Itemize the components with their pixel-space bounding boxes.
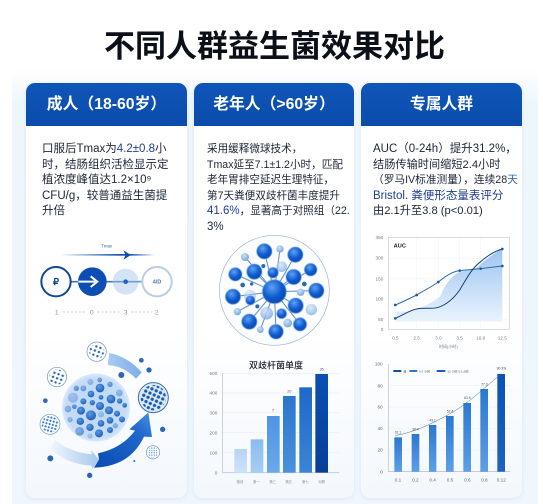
- text: special groups: Bristol. 粪便形态量表评分: [373, 190, 503, 202]
- bar chart: score by dose: 0.6: [464, 477, 471, 482]
- line chart: AUC: 10.0: [476, 336, 486, 341]
- bar chart: score by dose: 60: [377, 405, 383, 410]
- bar chart: bifidobacterium abundance: 400: [210, 391, 218, 396]
- bar chart: score by dose: 0.12: [497, 477, 506, 482]
- heading: adults: [26, 83, 187, 126]
- bar chart: score by dose: 100: [375, 362, 383, 367]
- line chart: AUC: [376, 235, 510, 349]
- line chart: AUC: 3.5: [456, 336, 463, 341]
- bar chart: bifidobacterium abundance: 500: [210, 371, 218, 376]
- timeline diagram: 0: [90, 309, 94, 316]
- legend: 0-1 小时: [419, 368, 430, 373]
- bar chart: bifidobacterium abundance: 双歧杆菌单度: [249, 359, 303, 370]
- legend: [393, 368, 469, 373]
- line chart: AUC: 150: [376, 276, 384, 281]
- panel: special groups: [361, 83, 522, 498]
- text: special groups: （罗马IV标准测量），连续28天: [373, 174, 518, 186]
- illustration: probiotic molecule network: [219, 235, 330, 346]
- text: adults: [42, 142, 168, 217]
- timeline diagram: ₽: [53, 277, 59, 287]
- bar chart: bifidobacterium abundance: 对照: [318, 479, 326, 484]
- heading: special groups: 专属人群: [410, 96, 473, 113]
- legend: 12 小时 0-1小时: [447, 368, 469, 373]
- text: adults: 口服后Tmax为4.2±0.8小: [42, 143, 167, 155]
- bar chart: score by dose: 43.1: [429, 418, 436, 422]
- line chart: AUC: AUC: [394, 243, 406, 249]
- bar chart: score by dose: 80: [377, 383, 383, 388]
- timeline diagram: Tmax: [101, 244, 113, 249]
- bar chart: score by dose: 20: [377, 448, 383, 453]
- bar chart: score by dose: 0.8: [481, 477, 488, 482]
- bar chart: bifidobacterium abundance: 0: [215, 470, 218, 475]
- timeline diagram: 1: [55, 309, 59, 316]
- text: elderly: [207, 142, 350, 233]
- bar chart: score by dose: 63.9: [464, 396, 471, 400]
- text: elderly: 41.6%，显著高于对照组（22.: [207, 205, 350, 217]
- bar chart: bifidobacterium abundance: 300: [210, 410, 218, 415]
- bar chart: bifidobacterium abundance: 第七: [302, 479, 309, 484]
- bar chart: bifidobacterium abundance: 35: [320, 368, 324, 372]
- text: elderly: 3%: [207, 221, 224, 233]
- line chart: AUC: 350: [376, 235, 384, 240]
- line chart: AUC: 0: [381, 327, 384, 332]
- heading: adults: 成人（18-60岁）: [47, 96, 166, 113]
- panel: adults: [26, 83, 187, 498]
- illustration: probiotic colonisation: [40, 342, 169, 478]
- text: elderly: 老年胃排空延迟生理特征，: [207, 174, 334, 186]
- bar chart: bifidobacterium abundance: 20: [287, 389, 291, 393]
- bar chart: score by dose: 0.5: [447, 477, 454, 482]
- title: 不同人群益生菌效果对比: [104, 29, 445, 64]
- line chart: AUC: 300: [376, 256, 384, 261]
- text: adults: 升倍: [42, 205, 65, 217]
- bar chart: score by dose: 34.4: [412, 427, 419, 431]
- line chart: AUC: 50: [378, 317, 384, 322]
- heading: elderly: 老年人（>60岁）: [213, 96, 335, 113]
- bar chart: score by dose: 77.0: [481, 382, 488, 386]
- bar chart: bifidobacterium abundance: 第一: [253, 479, 260, 484]
- bar chart: score by dose: 40: [377, 426, 383, 431]
- bar chart: score by dose: 31.1: [395, 431, 401, 435]
- line chart: AUC: 3.0: [435, 336, 442, 341]
- text: elderly: 采用缓释微球技术，: [207, 143, 302, 155]
- line chart: AUC: 0.5: [392, 336, 399, 341]
- bar chart: bifidobacterium abundance: 第五: [285, 479, 293, 484]
- text: special groups: AUC（0-24h）提升31.2%，: [373, 143, 517, 155]
- bar chart: bifidobacterium abundance: 基线: [237, 479, 244, 484]
- line chart: AUC: 12.5: [498, 336, 507, 341]
- timeline diagram: 3: [124, 309, 128, 316]
- text: special groups: 由2.1升至3.8 (p<0.01): [373, 205, 483, 217]
- bar chart: bifidobacterium abundance: 7: [272, 408, 274, 412]
- text: adults: 植浓度峰值达1.2×10⁹: [42, 174, 151, 186]
- bar chart: score by dose: 0: [380, 469, 383, 474]
- timeline diagram: 4/D: [153, 280, 161, 286]
- text: adults: CFU/g，较普通益生菌提: [42, 190, 167, 202]
- line chart: AUC: 100: [376, 297, 384, 302]
- timeline diagram: [40, 244, 173, 316]
- timeline diagram: 2: [155, 309, 159, 316]
- bar chart: bifidobacterium abundance: 第三: [269, 479, 277, 484]
- bar chart: score by dose: 0.2: [412, 477, 419, 482]
- legend: 组: [403, 368, 406, 373]
- bar chart: score by dose: 52.4: [447, 409, 453, 413]
- panel: elderly: [194, 83, 354, 498]
- bar chart: bifidobacterium abundance: [210, 359, 340, 484]
- text: adults: 时，结肠组织活检显示定: [42, 159, 168, 171]
- text: elderly: Tmax延至7.1±1.2小时，匹配: [207, 159, 343, 171]
- bar chart: bifidobacterium abundance: 100: [210, 450, 218, 455]
- bar chart: score by dose: 90.3%: [497, 367, 506, 371]
- text: special groups: [373, 142, 518, 217]
- heading: elderly: [194, 83, 354, 126]
- line chart: AUC: 2.5: [413, 336, 420, 341]
- text: special groups: 结肠传输时间缩短2.4小时: [373, 159, 500, 171]
- bar chart: score by dose: 0.1: [395, 477, 402, 482]
- heading: special groups: [361, 83, 522, 126]
- text: elderly: 第7天粪便双歧杆菌丰度提升: [207, 190, 340, 202]
- bar chart: score by dose: [375, 362, 510, 482]
- bar chart: bifidobacterium abundance: 200: [210, 430, 218, 435]
- line chart: AUC: 时间(小时): [439, 343, 458, 349]
- bar chart: score by dose: 0.4: [429, 477, 436, 482]
